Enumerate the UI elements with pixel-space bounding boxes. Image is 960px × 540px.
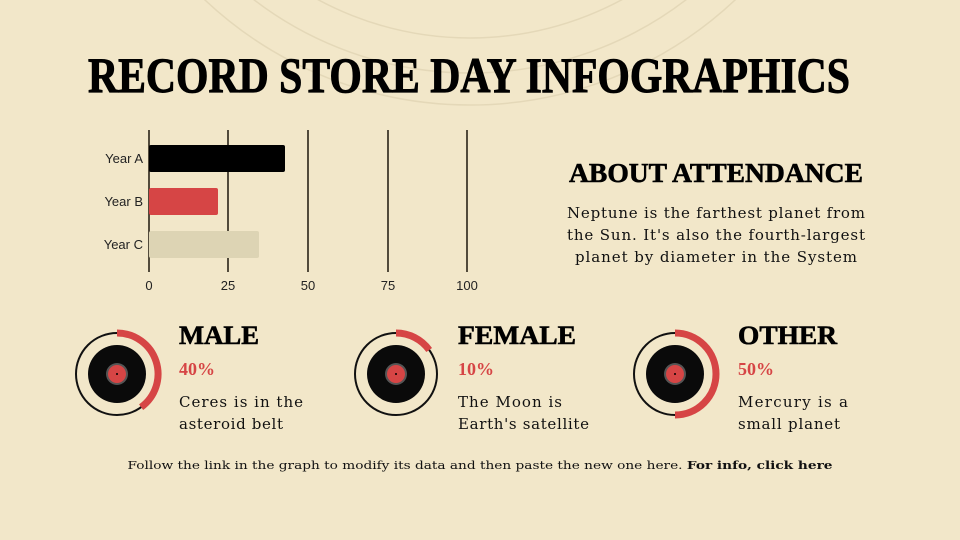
bar chart: [104, 130, 478, 293]
stat: male: Ceres is in the: [179, 393, 303, 411]
stat: male: 40%: [179, 359, 215, 379]
stat: male: asteroid belt: [179, 415, 283, 433]
heading: about attendance: ABOUT ATTENDANCE: [569, 158, 863, 188]
stat: female: The Moon is: [458, 393, 562, 411]
stat: female: [355, 321, 589, 433]
stat: female: FEMALE: [458, 321, 576, 350]
stat: other: 50%: [738, 359, 774, 379]
text: about attendance: [567, 204, 865, 266]
bar chart: Year C: [104, 237, 143, 252]
text: about attendance: Neptune is the farthest planet from: [567, 204, 865, 222]
bar chart: 100: [456, 278, 478, 293]
stat: other: [634, 321, 848, 433]
stat: female: Earth's satellite: [458, 415, 589, 433]
bar chart: 0: [145, 278, 153, 293]
stat: other: Mercury is a: [738, 393, 848, 411]
bar chart: Year B: [104, 194, 143, 209]
text: about attendance: the Sun. It's also the fourth-largest: [567, 226, 865, 244]
stat: other: small planet: [738, 415, 840, 433]
bar chart: Year A: [105, 151, 143, 166]
stat: female: 10%: [458, 359, 494, 379]
bar chart: 50: [301, 278, 315, 293]
stat: male: MALE: [179, 321, 259, 350]
stat: other: OTHER: [738, 321, 837, 350]
text: about attendance: planet by diameter in the System: [575, 248, 857, 266]
stat: male: [76, 321, 303, 433]
footer note: Follow the link in the graph to modify its data and then paste the new one here. For info, click here: [128, 458, 833, 472]
bar chart: 75: [381, 278, 395, 293]
bar chart: 25: [221, 278, 235, 293]
